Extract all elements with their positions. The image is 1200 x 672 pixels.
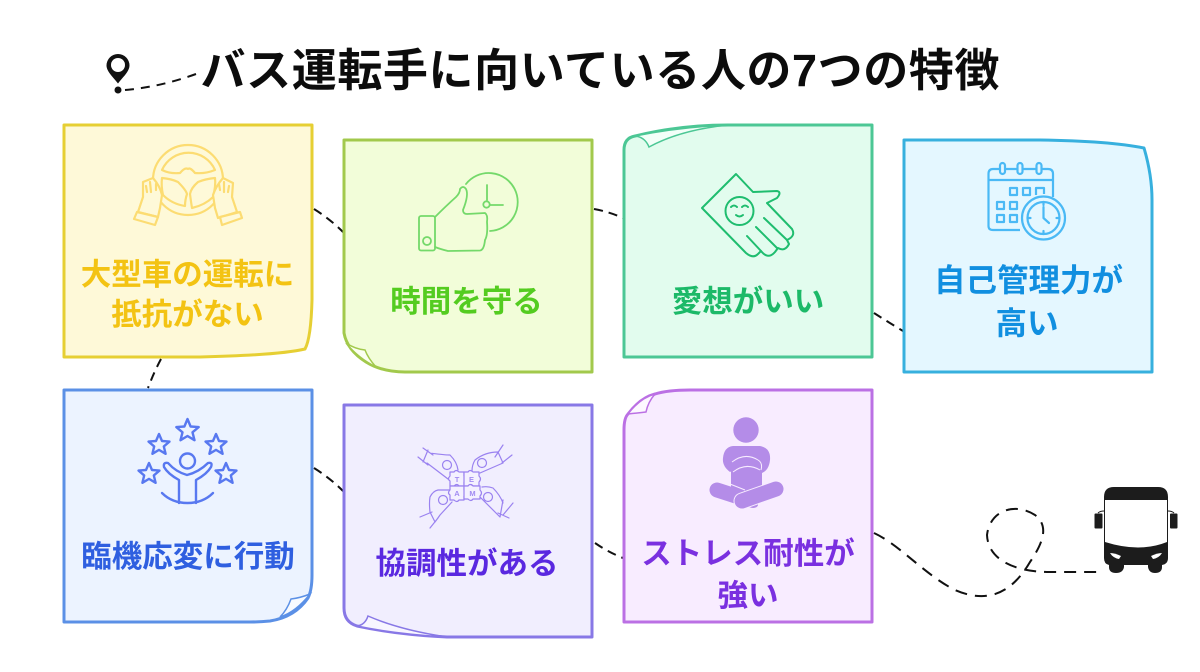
connector: card 1 to card 5 [148, 359, 161, 388]
panel: 大型車の運転に抵抗がない [64, 125, 312, 357]
icon: thumbs up with clock [419, 173, 518, 251]
label text: 大型車の運転に [81, 258, 294, 292]
connector: card 1 to card 2 [314, 209, 343, 232]
label text line 2: 強い [718, 579, 778, 613]
label text: 自己管理力が [934, 262, 1123, 298]
label text: ストレス耐性が [641, 536, 855, 571]
label text line 2: 抵抗がない [111, 297, 264, 332]
title: バス運転手に向いている人の7つの特徴 [200, 45, 1000, 96]
label text: 協調性がある [376, 546, 558, 581]
label text: 愛想がいい [672, 284, 824, 319]
panel: 時間を守る [344, 140, 592, 372]
connector: card 2 to card 3 [594, 209, 623, 218]
panel: ストレス耐性が強い [624, 390, 872, 622]
connector: card 6 to card 7 [595, 543, 623, 558]
icon: bus front view [1094, 487, 1178, 573]
panel: 臨機応変に行動 [64, 390, 312, 622]
icon: four hands assembling TEAM puzzle: T [455, 475, 460, 484]
icon: four hands assembling TEAM puzzle: A [454, 489, 460, 498]
icon: meditating person with crossed arms [717, 417, 776, 508]
panel: 協調性がある [344, 405, 592, 637]
connector: card 3 to card 4 [874, 313, 903, 331]
label text: 臨機応変に行動 [81, 540, 295, 574]
icon: map pin with dashed trail [106, 54, 196, 94]
panel: 自己管理力が高い [904, 140, 1152, 372]
icon: calendar with clock [988, 163, 1065, 240]
icon: hands on steering wheel [134, 145, 242, 225]
icon: four hands assembling TEAM puzzle [418, 445, 513, 528]
icon: four hands assembling TEAM puzzle: M [469, 489, 476, 498]
icon: hand holding smile [702, 174, 793, 256]
connector: card 5 to card 6 [314, 468, 343, 491]
arrow: dashed looping route to bus [874, 509, 1102, 596]
panel: 愛想がいい [624, 125, 872, 357]
label text line 2: 高い [995, 305, 1059, 341]
icon: person with five stars [138, 419, 236, 503]
label text: 時間を守る [390, 285, 543, 319]
icon: four hands assembling TEAM puzzle: E [469, 475, 474, 484]
